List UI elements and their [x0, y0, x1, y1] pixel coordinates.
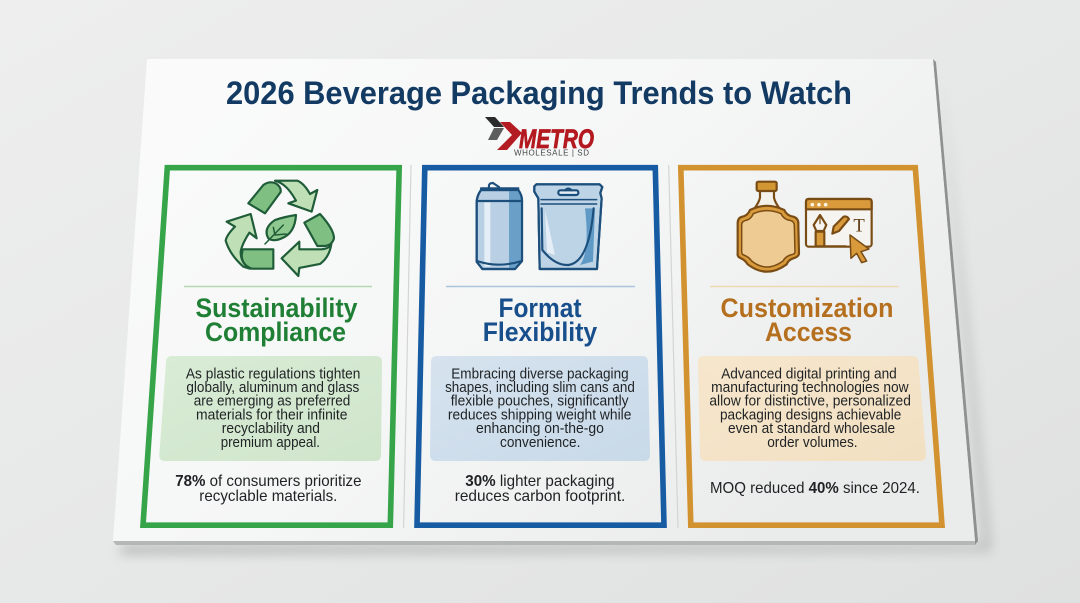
- heading: [483, 293, 597, 347]
- heading: Flexibility: [483, 317, 597, 347]
- text block: description: enhancing on-the-go: [476, 421, 604, 437]
- heading: Format: [498, 293, 582, 323]
- icon: bottle and design window: T: [853, 216, 865, 237]
- text block: description: [430, 356, 650, 461]
- panel: format flexibility: [417, 168, 664, 525]
- text block: description: allow for distinctive, personalized: [709, 394, 911, 410]
- panel: sustainability compliance: [143, 168, 399, 525]
- text block: description: convenience.: [500, 435, 580, 451]
- statistic: [175, 473, 362, 505]
- logo: Metro Wholesale SD: WHOLESALE | SD: [514, 148, 589, 158]
- heading: Customization: [720, 293, 894, 323]
- statistic: recyclable materials.: [199, 488, 337, 505]
- rule: [184, 286, 372, 288]
- text block: description: packaging designs achievable: [720, 408, 901, 424]
- divider lines: [404, 165, 678, 528]
- heading: Access: [765, 317, 852, 347]
- sheet: [113, 59, 978, 545]
- text block: description: Advanced digital printing and: [721, 366, 897, 382]
- text block: description: even at standard wholesale: [728, 421, 895, 437]
- statistic: reduces carbon footprint.: [455, 488, 625, 505]
- text block: description: order volumes.: [767, 435, 858, 451]
- rule: [446, 286, 635, 288]
- statistic: MOQ reduced 40% since 2024.: [710, 480, 920, 497]
- text block: description: reduces shipping weight while: [448, 408, 631, 424]
- icon: recycling symbol with leaf: [226, 181, 334, 276]
- text block: description: [159, 356, 382, 461]
- text block: description: manufacturing technologies now: [711, 380, 909, 396]
- logo: Metro Wholesale SD: METRO: [519, 124, 594, 154]
- logo: Metro Wholesale SD: [485, 117, 594, 158]
- text block: description: shapes, including slim cans and: [445, 380, 635, 396]
- text block: description: As plastic regulations tighten: [186, 366, 360, 382]
- statistic: 30% lighter packaging: [465, 473, 615, 490]
- heading: Sustainability: [196, 293, 358, 323]
- heading: [196, 293, 358, 347]
- statistic: [455, 473, 625, 505]
- icon: bottle and design window: [738, 182, 872, 272]
- text block: description: recyclability and: [222, 421, 320, 437]
- text block: description: [698, 356, 926, 461]
- text block: description: are emerging as preferred: [194, 394, 350, 410]
- text block: description: materials for their infinite: [196, 408, 348, 424]
- text block: description: Embracing diverse packaging: [451, 366, 629, 382]
- heading: [720, 293, 894, 347]
- panel: customization access: [681, 168, 942, 525]
- text block: description: globally, aluminum and glass: [186, 380, 359, 396]
- title: 2026 Beverage Packaging Trends to Watch: [226, 75, 852, 111]
- text block: description: premium appeal.: [221, 435, 320, 451]
- icon: can and pouch: [477, 183, 602, 269]
- text block: description: flexible pouches, significantly: [451, 394, 629, 410]
- rule: [710, 286, 899, 288]
- statistic: 78% of consumers prioritize: [175, 473, 362, 490]
- heading: Compliance: [205, 317, 346, 347]
